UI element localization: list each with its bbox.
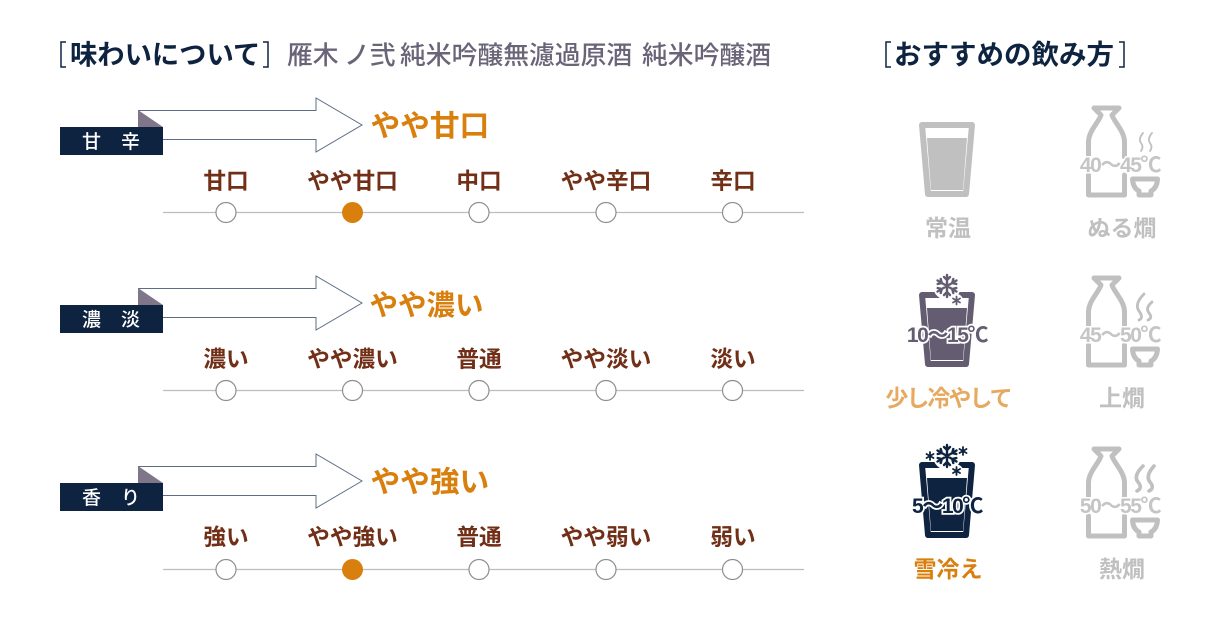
- icon: snow chilled glass 5-10: [912, 442, 983, 535]
- panel: richness scale: [60, 276, 804, 400]
- scale labels: やや濃い: [307, 346, 398, 372]
- subtitle: sake name: 雁木: [287, 41, 339, 70]
- icon: nurukan bottle 40-45: 40～45℃: [1080, 154, 1162, 177]
- arrow: aroma result: [138, 454, 362, 508]
- scale labels: やや強い: [307, 524, 398, 550]
- scale labels: やや辛口: [561, 168, 651, 194]
- icon: atsukan bottle 50-55: [1080, 449, 1162, 536]
- tag: rich-light: 淡: [121, 309, 140, 331]
- icon: snow chilled glass 5-10: 5～10℃: [912, 495, 983, 518]
- scale labels: やや淡い: [561, 346, 651, 372]
- title: how to drink heading: おすすめの飲み方: [894, 39, 1114, 70]
- label: snow chilled: 雪冷え: [914, 556, 982, 582]
- tag: aroma: り: [121, 488, 140, 509]
- tag: aroma: [60, 466, 163, 511]
- icon: jokan bottle 45-50: [1080, 278, 1162, 365]
- icon: chilled glass 10-15: 10～15℃: [907, 324, 989, 347]
- scale labels: [203, 524, 756, 550]
- arrow: sweetness result: [138, 98, 362, 152]
- scale labels: 普通: [456, 346, 502, 372]
- scale labels: 中口: [456, 168, 502, 194]
- scale labels: 弱い: [710, 524, 756, 550]
- icon: room temperature glass: [922, 125, 972, 194]
- tag: sweet-dry: [60, 110, 163, 155]
- label: nurukan: ぬる燗: [1088, 215, 1156, 241]
- scale labels: 普通: [456, 524, 502, 550]
- scale labels: 甘口: [203, 168, 249, 194]
- title: flavour heading: 味わいについて: [70, 39, 260, 70]
- scale labels: やや甘口: [307, 168, 398, 194]
- tag: rich-light: 濃: [82, 309, 101, 331]
- label: room temperature: 常温: [925, 215, 971, 241]
- panel: aroma scale: [60, 454, 804, 580]
- icon: nurukan bottle 40-45: [1080, 108, 1162, 195]
- scale labels: [203, 346, 756, 372]
- subtitle: sake name: 純米吟醸酒: [642, 41, 771, 70]
- label: jokan: 上燗: [1099, 385, 1145, 411]
- scale labels: [203, 168, 756, 194]
- result text: やや甘口: [370, 110, 489, 143]
- scale line and markers: [163, 380, 804, 400]
- label: atsukan: 熱燗: [1099, 556, 1145, 582]
- tag: sweet-dry: 甘: [82, 131, 101, 153]
- scale line and markers: [163, 202, 804, 223]
- tag: aroma: 香: [82, 487, 101, 509]
- result text: やや強い: [370, 466, 489, 499]
- scale labels: 濃い: [203, 346, 249, 372]
- subtitle: sake name: ノ弐: [344, 41, 396, 70]
- label: slightly chilled: 少し冷やして: [885, 385, 1011, 411]
- arrow: richness result: [138, 276, 362, 330]
- scale labels: やや弱い: [561, 524, 651, 550]
- scale labels: 淡い: [710, 346, 756, 372]
- icon: jokan bottle 45-50: 45～50℃: [1080, 324, 1162, 347]
- result text: やや濃い: [370, 290, 484, 322]
- icon: chilled glass 10-15: [907, 272, 989, 364]
- tag: sweet-dry: 辛: [121, 131, 140, 153]
- scale labels: 辛口: [710, 168, 756, 194]
- icon: atsukan bottle 50-55: 50～55℃: [1080, 495, 1162, 518]
- subtitle: sake name: 純米吟醸無濾過原酒: [400, 41, 632, 70]
- panel: sweetness scale: [60, 98, 804, 223]
- scale line and markers: [163, 559, 804, 580]
- tag: rich-light: [60, 288, 163, 333]
- scale labels: 強い: [203, 524, 249, 550]
